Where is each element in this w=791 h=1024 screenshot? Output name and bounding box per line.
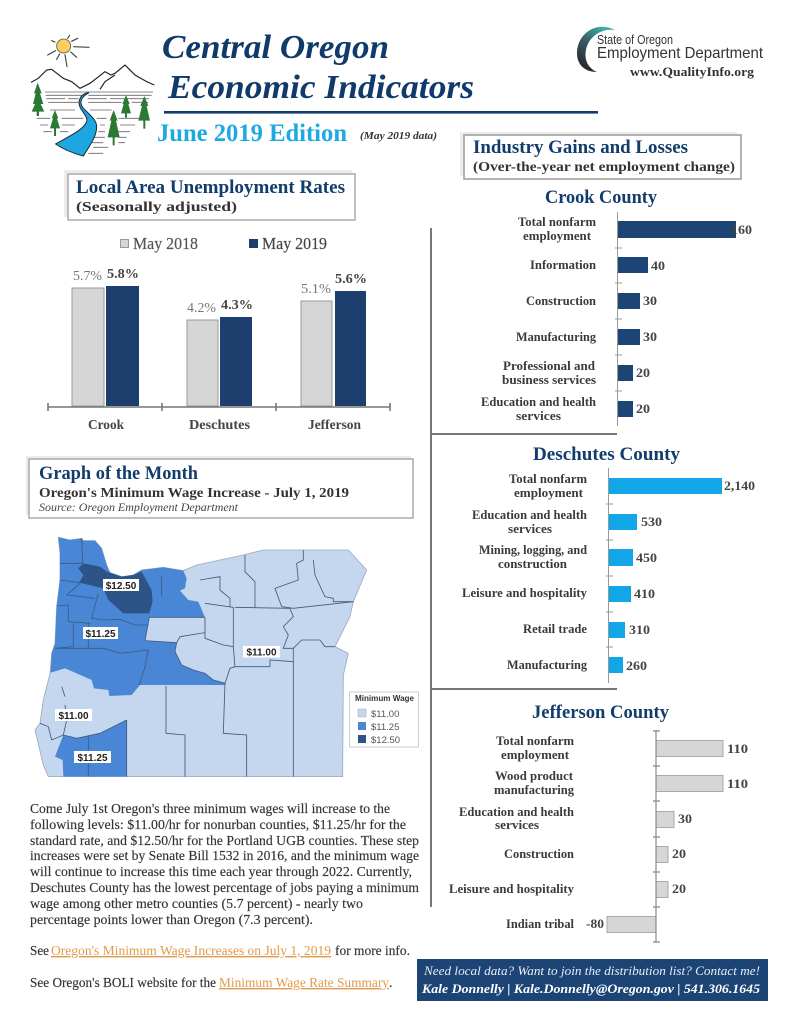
title: Central Oregon — [162, 29, 389, 66]
category labels: Construction — [526, 294, 596, 308]
heading: Crook County: Crook County — [545, 188, 658, 208]
map label: $11.25 north: $11.25 — [85, 629, 116, 640]
bars — [609, 478, 722, 673]
text block: minimum wage explanation: Come July 1st Oregon's three minimum wages will increase to the — [30, 802, 390, 817]
text block: minimum wage explanation: wage among other metro counties (5.7 percent) - nearly two — [30, 897, 363, 912]
category labels: Retail trade — [523, 622, 587, 636]
heading: Deschutes County: Deschutes County — [533, 445, 681, 465]
text block: minimum wage explanation: standard rate, and $12.50/hr for the Portland UGB counties. These step — [30, 834, 419, 849]
text block: minimum wage explanation: following levels: $11.00/hr for nonurban counties, $11.25/hr for the — [30, 818, 406, 833]
link line: BOLI summary — [30, 976, 392, 991]
bars: Crook — [72, 267, 139, 406]
values: 530 — [641, 514, 662, 529]
category labels: employment — [501, 748, 570, 762]
category labels: Indian tribal — [506, 917, 575, 931]
category labels: manufacturing — [494, 783, 575, 797]
values: 110 — [727, 741, 748, 756]
logo: Employment Department — [577, 27, 764, 79]
category labels: Professional and — [503, 359, 595, 373]
values: 20 — [672, 846, 686, 861]
bars: Jefferson: 5.1% — [301, 282, 331, 297]
text block: minimum wage explanation: increases were set by Senate Bill 1532 in 2016, and the minimum wage — [30, 849, 419, 864]
category labels: Wood product — [495, 769, 574, 783]
link line: BOLI summary: See Oregon's BOLI website for the — [30, 976, 216, 991]
text block: minimum wage explanation — [30, 802, 419, 928]
map label: $11.00 south-west: $11.00 — [58, 711, 89, 722]
category labels: Manufacturing — [516, 330, 597, 344]
bars: Crook: 5.8% — [107, 267, 139, 282]
link line: wage increases: Oregon's Minimum Wage Increases on July 1, 2019 — [51, 944, 331, 959]
values: 450 — [636, 550, 657, 565]
chart: Jefferson County — [449, 703, 748, 942]
callout: contact: Kale Donnelly | Kale.Donnelly@Oregon.gov | 541.306.1645 — [421, 981, 761, 996]
legend: May 2019 — [262, 234, 327, 253]
chart: unemployment rates — [48, 234, 390, 433]
panel: unemployment heading: (Seasonally adjusted) — [76, 200, 237, 215]
category labels: employment — [523, 229, 592, 243]
heading: Jefferson County: Jefferson County — [532, 703, 670, 723]
category labels: Education and health — [472, 508, 587, 522]
title rule — [164, 111, 598, 114]
category labels: Leisure and hospitality — [462, 586, 588, 600]
values: 30 — [678, 811, 692, 826]
category labels: services — [516, 409, 561, 423]
values: 20 — [636, 365, 650, 380]
category labels — [462, 472, 588, 672]
title — [162, 29, 474, 106]
logo: Employment Department: www.QualityInfo.org — [630, 64, 755, 79]
category labels: Crook — [88, 418, 124, 433]
panel: graph of the month heading: Oregon's Minimum Wage Increase - July 1, 2019 — [39, 486, 349, 501]
category labels: services — [508, 522, 552, 536]
category labels: Construction — [504, 847, 574, 861]
category labels: Education and health — [459, 805, 574, 819]
panel: industry gains heading — [460, 132, 741, 179]
category labels: Deschutes — [189, 418, 251, 433]
category labels: business services — [502, 373, 596, 387]
category labels: services — [495, 818, 539, 832]
bars: Deschutes — [187, 298, 253, 406]
text block: minimum wage explanation: percentage points lower than Oregon (7.3 percent). — [30, 913, 313, 928]
values — [586, 741, 748, 931]
category labels: employment — [514, 486, 584, 500]
map legend: $11.00 — [371, 709, 399, 720]
category labels — [449, 734, 575, 931]
values: 20 — [672, 881, 686, 896]
panel: graph of the month heading: Graph of the Month — [39, 464, 199, 484]
values — [636, 222, 752, 416]
panel: unemployment heading: Local Area Unemployment Rates — [76, 178, 345, 198]
values: 30 — [643, 293, 657, 308]
logo: Employment Department: Employment Department — [597, 45, 764, 62]
chart: Crook County — [481, 188, 752, 426]
category labels: Mining, logging, and — [479, 543, 587, 557]
values: -80 — [586, 916, 604, 931]
bars — [607, 740, 723, 932]
values: 30 — [643, 329, 657, 344]
map label: $11.25 south — [74, 751, 111, 764]
bars: Crook: 5.7% — [73, 269, 102, 284]
category labels: Jefferson — [308, 418, 361, 433]
panel: graph of the month heading: Source: Oregon Employment Department — [39, 502, 239, 514]
panel: industry gains heading: (Over-the-year net employment change) — [473, 160, 735, 175]
map legend: $11.25 — [371, 722, 399, 733]
category labels: construction — [498, 557, 567, 571]
bars: Deschutes: 4.2% — [187, 301, 216, 316]
bars: Jefferson: 5.6% — [335, 272, 367, 287]
edition label: (May 2019 data) — [360, 131, 437, 142]
values: 260 — [626, 658, 647, 673]
category labels: Total nonfarm — [509, 472, 588, 486]
link line: BOLI summary: Minimum Wage Rate Summary — [219, 976, 389, 991]
panel: unemployment heading — [64, 170, 355, 220]
map: Oregon minimum wage — [35, 537, 367, 777]
bars — [618, 221, 736, 417]
values — [626, 478, 755, 673]
category labels — [481, 215, 597, 423]
callout: contact: Need local data? Want to join the distribution list? Contact me! — [423, 963, 760, 978]
values: 160 — [731, 222, 752, 237]
chart: Deschutes County — [462, 445, 755, 683]
edition label: June 2019 Edition — [157, 120, 347, 147]
icon: landscape logo — [31, 35, 154, 156]
legend: May 2018 — [133, 234, 198, 253]
bars: Deschutes: 4.3% — [221, 298, 253, 313]
category labels: Leisure and hospitality — [449, 882, 575, 896]
text block: minimum wage explanation: will continue to increase this time each year through 2022. Currently, — [30, 865, 412, 880]
panel: graph of the month heading — [26, 456, 413, 518]
map legend: $12.50 — [371, 735, 400, 746]
values: 40 — [651, 258, 665, 273]
link line: BOLI summary: . — [389, 976, 392, 991]
category labels: Total nonfarm — [496, 734, 575, 748]
text block: minimum wage explanation: Deschutes County has the lowest percentage of jobs paying a minimum — [30, 881, 419, 896]
logo: Employment Department: State of Oregon — [597, 33, 673, 47]
link line: wage increases: for more info. — [335, 944, 410, 959]
legend — [120, 234, 327, 253]
map legend — [350, 692, 418, 747]
edition label — [157, 120, 437, 147]
values: 110 — [727, 776, 748, 791]
callout: contact — [417, 959, 768, 1001]
map label: $11.00 south-west — [55, 709, 92, 722]
values: 410 — [634, 586, 655, 601]
map label: $12.50: $12.50 — [106, 581, 137, 592]
panel: industry gains heading: Industry Gains and Losses — [473, 138, 688, 158]
values: 2,140 — [724, 478, 755, 493]
category labels: Manufacturing — [507, 658, 588, 672]
link line: wage increases: See — [30, 944, 49, 959]
category labels: Total nonfarm — [518, 215, 597, 229]
bars: Jefferson — [301, 272, 367, 406]
map label: $11.00 east: $11.00 — [246, 648, 277, 658]
category labels — [88, 418, 361, 433]
values: 310 — [629, 622, 650, 637]
category labels: Information — [530, 258, 596, 272]
title: Economic Indicators — [167, 69, 474, 106]
map legend: Minimum Wage — [355, 694, 415, 703]
map label: $11.25 south: $11.25 — [77, 753, 108, 764]
category labels: Education and health — [481, 395, 596, 409]
values: 20 — [636, 401, 650, 416]
